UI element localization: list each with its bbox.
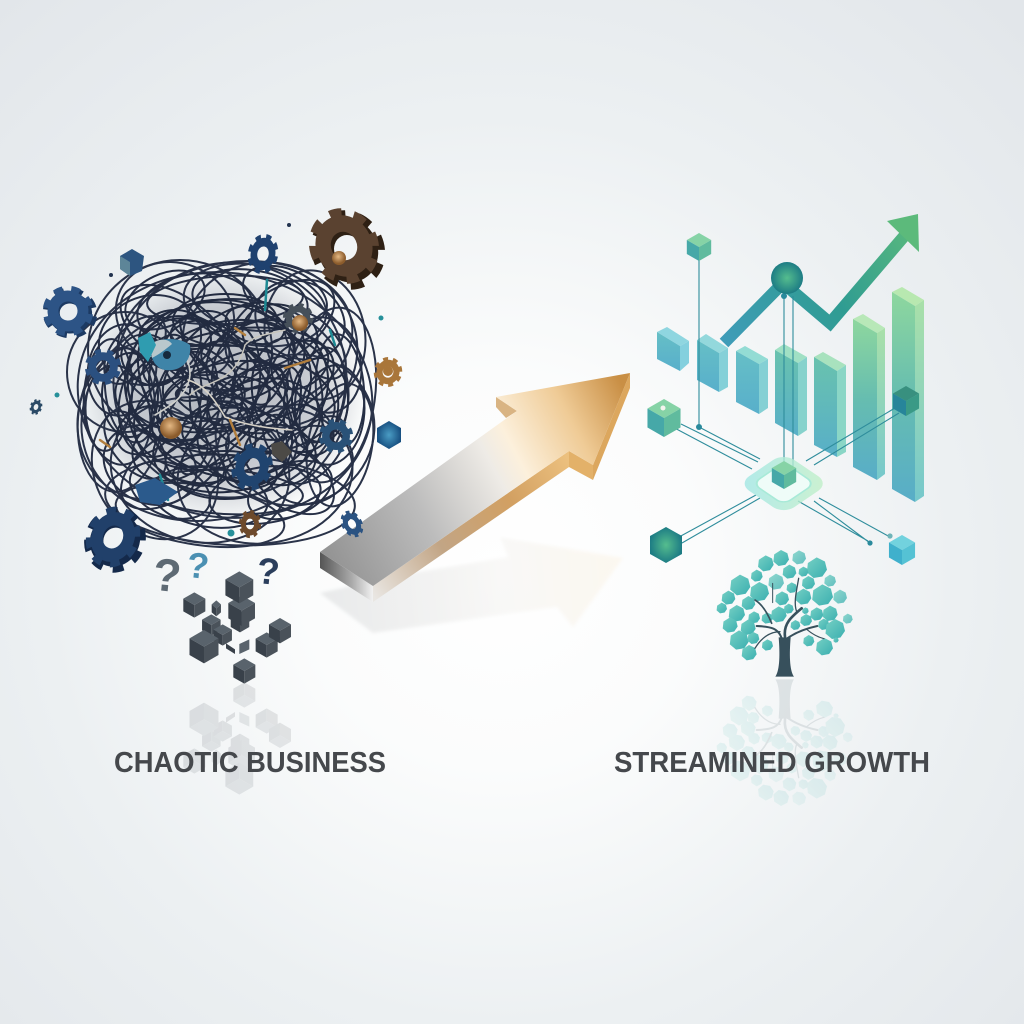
mid ring of tangle: [79, 254, 371, 535]
tree reflection: [717, 679, 853, 806]
tangle core shading: [85, 270, 365, 520]
bars: [657, 287, 924, 502]
tree leaves: [717, 550, 853, 660]
arrow reflection: [320, 537, 623, 633]
tree trunk and branches: [755, 578, 824, 677]
cube reflection: [183, 682, 291, 795]
network dots: [696, 293, 893, 546]
scattered cubes: [183, 571, 291, 684]
floating parts: [54, 223, 401, 536]
dense core of tangle: [98, 271, 352, 512]
question marks: ?: [150, 548, 184, 602]
question marks: ?: [255, 550, 282, 593]
growth line arrow: [724, 214, 919, 343]
chaotic business illustration: [29, 203, 404, 795]
central hub platform: [738, 453, 829, 514]
heading: chaotic business: CHAOTIC BUSINESS: [114, 747, 386, 779]
network connectors: [667, 258, 899, 543]
heading: streamlined growth: STREAMINED GROWTH: [614, 747, 930, 779]
gears: [29, 203, 404, 577]
wire tangle: [52, 220, 396, 562]
question marks: ?: [185, 544, 211, 587]
streamlined growth chart: [647, 214, 924, 565]
growth tree: [717, 550, 853, 677]
sphere node: [771, 262, 803, 294]
question marks: [150, 544, 282, 602]
central 3D arrow: [320, 373, 630, 602]
network cubes: [647, 233, 919, 565]
silver and copper strands: [100, 280, 335, 500]
